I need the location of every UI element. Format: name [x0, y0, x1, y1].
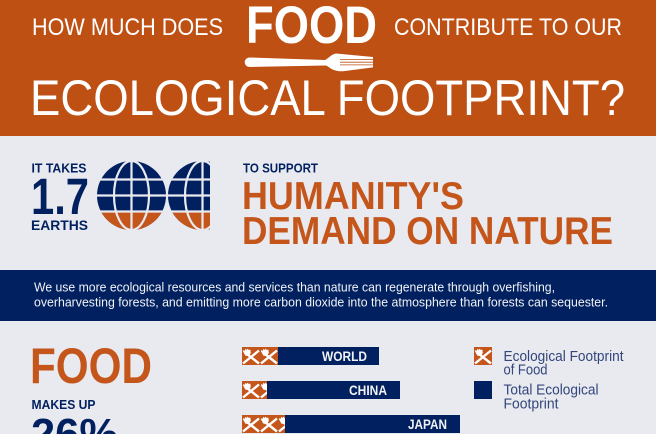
heading: food: FOOD: [30, 338, 152, 394]
panel: 1.7 earths: [32, 161, 210, 230]
legend item: food footprint: of Food: [504, 362, 548, 378]
heading: humanity's: HUMANITY'S: [242, 175, 464, 218]
icon: partial globe: [168, 161, 210, 230]
legend item: food footprint: [474, 347, 624, 378]
text: line two: overharvesting forests, and emitting more carbon dioxide into the atmosphere than forests can sequester.: [34, 294, 608, 310]
text: makes up: MAKES UP: [32, 397, 96, 412]
icon: full globe: [96, 160, 168, 232]
legend item: total footprint: Footprint: [504, 396, 558, 412]
bar: japan: [242, 415, 460, 433]
legend item: food footprint: Ecological Footprint: [504, 349, 624, 365]
bar: world: [242, 347, 379, 365]
panel: humanity's demand: [242, 160, 613, 253]
number: 1.7: 1.7: [31, 168, 89, 225]
legend item: total footprint: Total Ecological: [504, 382, 598, 398]
bar: japan: JAPAN: [408, 417, 447, 432]
panel: explanation band: [0, 270, 656, 321]
panel: food share: [30, 338, 152, 434]
heading: demand on nature: DEMAND ON NATURE: [242, 210, 613, 253]
heading: contribute to our: CONTRIBUTE TO OUR: [394, 14, 622, 41]
bar: world: WORLD: [322, 349, 367, 364]
text: to support: TO SUPPORT: [243, 160, 318, 176]
text: line one: We use more ecological resources and services than nature can regenerate through overfishing,: [34, 280, 555, 294]
header band: [0, 0, 656, 136]
text: earths: EARTHS: [31, 217, 88, 233]
bar: china: CHINA: [349, 383, 387, 398]
heading: how much does: HOW MUCH DOES: [32, 14, 223, 41]
legend: [474, 347, 624, 412]
bar chart: footprints: [242, 347, 460, 433]
text: it takes: IT TAKES: [32, 160, 87, 176]
icon: fork: [245, 54, 374, 71]
bar: china: [242, 381, 400, 399]
legend item: total footprint: [474, 381, 598, 412]
